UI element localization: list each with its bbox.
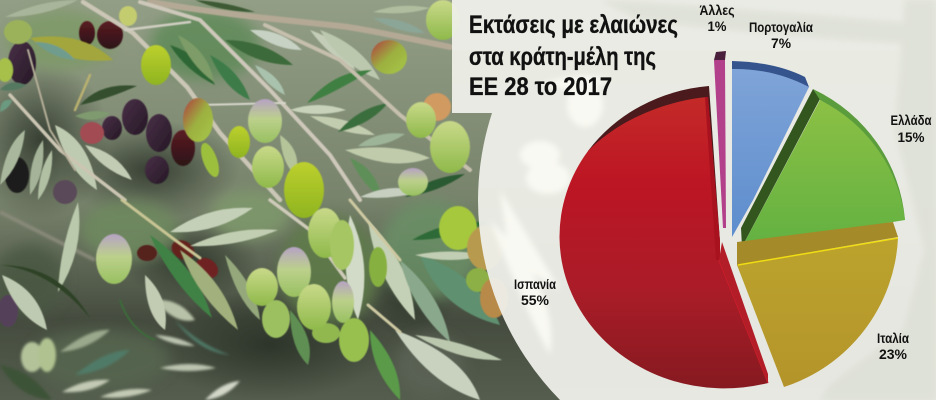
label: Πορτογαλία 7%: Πορτογαλία (749, 19, 813, 35)
foliage mass (0, 10, 480, 395)
branches (10, 2, 470, 332)
label: Άλλες 1% (700, 2, 734, 34)
title: ΕΕ 28 το 2017 (469, 73, 612, 101)
leaves (0, 0, 502, 400)
pale overlay panel behind chart and title (452, 0, 936, 400)
label: Πορτογαλία 7%: 7% (771, 35, 792, 51)
label: Άλλες 1%: 1% (708, 18, 727, 34)
label: Ισπανία 55%: Ισπανία (514, 276, 556, 292)
label: Ισπανία 55% (514, 276, 556, 308)
blurred lower-left foliage (0, 212, 240, 400)
title: Εκτάσεις με ελαιώνες (469, 11, 678, 39)
title: στα κράτη-μέλη της (469, 43, 656, 71)
green olives (96, 0, 508, 362)
label: Ιταλία 23%: 23% (879, 346, 908, 362)
slice: Greece (741, 89, 905, 247)
label: Ελλάδα 15%: 15% (898, 129, 925, 145)
label: Άλλες 1%: Άλλες (700, 2, 734, 18)
slice: Other (714, 51, 726, 228)
label: Ιταλία 23% (877, 330, 909, 362)
slice: Italy (737, 222, 898, 387)
label: Ελλάδα 15% (890, 112, 932, 145)
slice: Spain (560, 86, 768, 388)
dark and purple olives (0, 6, 222, 327)
pie chart (560, 51, 905, 388)
label: Ιταλία 23%: Ιταλία (877, 330, 909, 346)
slice: Portugal (732, 61, 809, 237)
label: Ισπανία 55%: 55% (521, 292, 550, 308)
label: Πορτογαλία 7% (749, 19, 813, 51)
title (469, 11, 678, 101)
